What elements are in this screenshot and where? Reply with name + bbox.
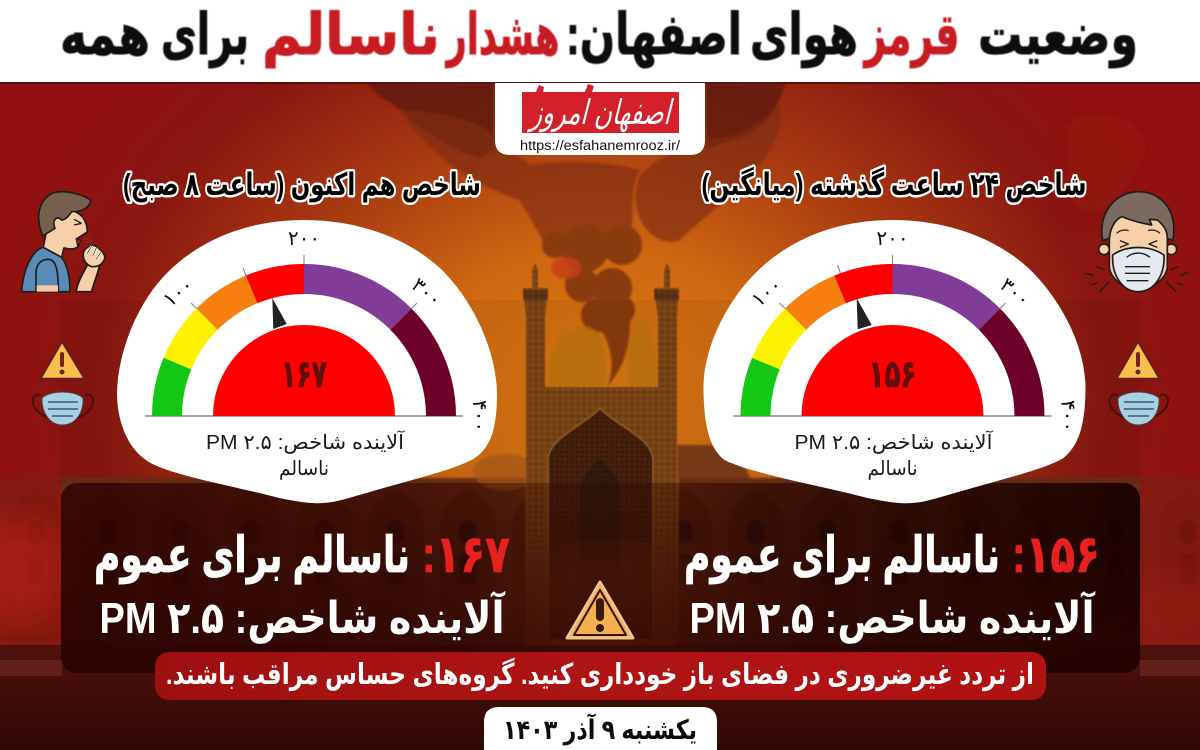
status: 156 right: ۱۵۶: xyxy=(1012,526,1100,584)
pollutant: left: آلاینده شاخص: ۲.۵ PM xyxy=(100,590,505,644)
scale labels: ۱۰۰ xyxy=(748,274,787,312)
arcade buildings xyxy=(0,445,1200,650)
tick marks xyxy=(734,255,1052,416)
logo url: https://esfahanemrooz.ir/ xyxy=(520,138,680,153)
title: ناسالم xyxy=(262,3,440,68)
haze around portal xyxy=(470,550,810,670)
icon: coughing man xyxy=(22,192,105,292)
status: 167 left: ناسالم برای عموم xyxy=(94,527,410,585)
title: قرمز xyxy=(863,3,960,68)
value: ۱۵۶ xyxy=(868,354,916,396)
icon: small mask left xyxy=(33,392,93,425)
title: هشدار xyxy=(445,3,560,68)
gauge segments xyxy=(152,264,456,416)
darker centre band xyxy=(60,300,1140,484)
status label: ناسالم xyxy=(868,458,918,480)
scale labels xyxy=(159,228,490,432)
status label: ناسالم xyxy=(279,458,329,480)
scale labels: ۱۰۰ xyxy=(159,274,198,312)
value: ۱۶۷ xyxy=(281,354,327,396)
date tab xyxy=(484,707,717,750)
scale labels: ۲۰۰ xyxy=(288,228,320,250)
gauge: current 167 xyxy=(117,220,497,503)
icon: small mask right xyxy=(1109,392,1168,425)
icon: small warning left xyxy=(40,341,85,379)
centre dial xyxy=(802,325,984,416)
scale labels: ۳۰۰ xyxy=(407,274,446,312)
logo wordmark: اصفهان امروز xyxy=(526,94,677,133)
side red tint over buildings xyxy=(0,478,1200,678)
heading: 24 hour index: شاخص ۲۴ ساعت گذشته (میانگین) xyxy=(702,166,1086,203)
title: وضعیت xyxy=(978,3,1138,68)
scale labels: ۴۰۰ xyxy=(468,400,490,432)
gauge: 24 hours 156 xyxy=(704,220,1086,503)
gauge card xyxy=(704,220,1086,503)
needle xyxy=(857,298,872,329)
pollutant label: آلاینده شاخص: ۲.۵ PM xyxy=(206,429,406,454)
scale labels: ۲۰۰ xyxy=(876,228,909,250)
scale labels: ۳۰۰ xyxy=(995,274,1034,312)
status: 167 left: ۱۶۷: xyxy=(422,526,510,584)
ground xyxy=(0,645,1200,750)
scale labels xyxy=(748,228,1078,432)
icon: central warning triangle xyxy=(567,582,633,638)
smoke clouds xyxy=(367,83,1150,386)
logo red box xyxy=(522,84,679,133)
gauge segments xyxy=(740,264,1044,416)
advice banner xyxy=(155,652,1046,700)
needle xyxy=(272,298,287,329)
mosque portal xyxy=(523,263,679,640)
heading: current index: شاخص هم اکنون (ساعت ۸ صبح) xyxy=(123,167,481,203)
main plume xyxy=(542,224,642,386)
title: همه xyxy=(60,3,150,67)
top white title band xyxy=(0,0,1200,83)
bottom dark panel xyxy=(61,483,1140,673)
gauge card xyxy=(117,220,497,503)
title xyxy=(60,3,1138,68)
pollutant: right: آلاینده شاخص: ۲.۵ PM xyxy=(690,590,1095,644)
tick marks xyxy=(145,255,463,416)
logo tab xyxy=(495,83,705,155)
scale labels: ۴۰۰ xyxy=(1056,400,1078,432)
pollutant label: آلاینده شاخص: ۲.۵ PM xyxy=(795,429,994,454)
status: 156 right: ناسالم برای عموم xyxy=(684,527,1000,585)
title: هوای xyxy=(750,3,858,68)
icon: masked sneezing man xyxy=(1085,192,1188,292)
centre dial xyxy=(213,325,395,416)
title: اصفهان: xyxy=(566,3,742,68)
date tab: یکشنبه ۹ آذر ۱۴۰۳ xyxy=(503,713,697,746)
title: برای xyxy=(161,3,249,68)
icon: small warning right xyxy=(1116,341,1160,379)
